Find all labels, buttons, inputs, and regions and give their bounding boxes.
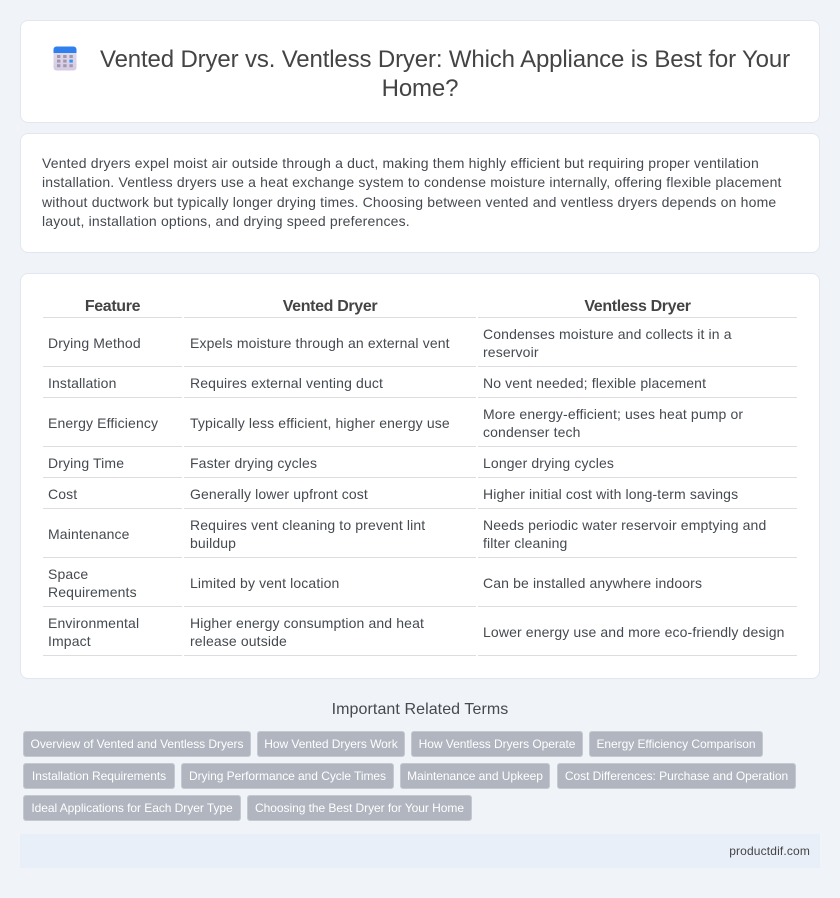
- tag: Ideal Applications for Each Dryer Type: [31, 801, 233, 815]
- intro text: without ductwork but typically longer drying times. Choosing between vented and ventless dryers depends on home: [42, 194, 776, 210]
- row: maintenance: Requires vent cleaning to prevent lint: [190, 517, 425, 533]
- panel: header: [20, 20, 820, 123]
- comparison table: [43, 298, 797, 656]
- icon: calendar: [54, 46, 76, 70]
- row: drying method: Condenses moisture and collects it in a: [483, 326, 732, 342]
- tag: How Ventless Dryers Operate: [419, 737, 575, 751]
- row: space requirements: Requirements: [48, 584, 137, 600]
- table header row: Ventless Dryer: [584, 298, 691, 315]
- row: maintenance: [43, 517, 797, 558]
- row: energy efficiency: [43, 406, 797, 447]
- tag: [589, 731, 763, 757]
- tag: [557, 763, 796, 789]
- row: drying method: Expels moisture through an external vent: [190, 335, 450, 351]
- tag: How Vented Dryers Work: [264, 737, 398, 751]
- row: environmental impact: Environmental: [48, 615, 139, 631]
- row: cost: [43, 486, 797, 509]
- row: environmental impact: Impact: [48, 633, 91, 649]
- row: drying time: Faster drying cycles: [190, 455, 317, 471]
- row: maintenance: Needs periodic water reservoir emptying and: [483, 517, 766, 533]
- tag: Choosing the Best Dryer for Your Home: [255, 801, 464, 815]
- tag: [400, 763, 550, 789]
- row: drying method: [43, 326, 797, 367]
- row: drying method: reservoir: [483, 344, 539, 360]
- row: space requirements: Space: [48, 566, 88, 582]
- row: environmental impact: release outside: [190, 633, 287, 649]
- row: maintenance: buildup: [190, 535, 236, 551]
- intro text: [42, 154, 782, 229]
- tag: Overview of Vented and Ventless Dryers: [31, 737, 243, 751]
- row: space requirements: Limited by vent location: [190, 575, 339, 591]
- row: environmental impact: Higher energy consumption and heat: [190, 615, 424, 631]
- tag: [257, 731, 405, 757]
- row: installation: No vent needed; flexible placement: [483, 375, 706, 391]
- tag: [23, 795, 241, 821]
- intro text: layout, installation options, and drying speed preferences.: [42, 213, 410, 229]
- row: cost: Higher initial cost with long-term savings: [483, 486, 738, 502]
- tag: Energy Efficiency Comparison: [596, 737, 756, 751]
- tag: [411, 731, 583, 757]
- panel: introduction: [20, 133, 820, 253]
- panel: comparison table: [20, 273, 820, 679]
- table header row: Vented Dryer: [283, 298, 377, 315]
- title: [100, 46, 790, 102]
- row: drying method: Drying Method: [48, 335, 141, 351]
- intro text: Vented dryers expel moist air outside through a duct, making them highly efficient but requiring proper ventilation: [42, 154, 759, 170]
- title: Home?: [382, 75, 458, 102]
- row: drying time: [43, 455, 797, 478]
- row: cost: Cost: [48, 486, 77, 502]
- footer site name: productdif.com: [729, 844, 810, 858]
- table header row: Feature: [85, 298, 140, 315]
- footer bar: [20, 834, 820, 868]
- row: installation: [43, 375, 797, 398]
- row: energy efficiency: Typically less efficient, higher energy use: [190, 415, 450, 431]
- tag: [247, 795, 472, 821]
- tag: [181, 763, 394, 789]
- related terms tags: [23, 731, 796, 821]
- row: space requirements: Can be installed anywhere indoors: [483, 575, 702, 591]
- tag: Maintenance and Upkeep: [407, 769, 543, 783]
- row: energy efficiency: More energy-efficient; uses heat pump or: [483, 406, 743, 422]
- row: drying time: Drying Time: [48, 455, 124, 471]
- tag: Installation Requirements: [32, 769, 166, 783]
- row: environmental impact: Lower energy use and more eco-friendly design: [483, 624, 785, 640]
- row: energy efficiency: Energy Efficiency: [48, 415, 158, 431]
- row: environmental impact: [43, 615, 797, 656]
- title: Vented Dryer vs. Ventless Dryer: Which Appliance is Best for Your: [100, 46, 790, 73]
- tag: Drying Performance and Cycle Times: [189, 769, 386, 783]
- tag: [23, 763, 175, 789]
- tag: [23, 731, 251, 757]
- row: cost: Generally lower upfront cost: [190, 486, 368, 502]
- row: installation: Installation: [48, 375, 116, 391]
- row: installation: Requires external venting duct: [190, 375, 383, 391]
- heading: important related terms: Important Related Terms: [332, 701, 508, 718]
- table header row: [43, 298, 797, 318]
- intro text: installation. Ventless dryers use a heat exchange system to condense moisture internally, offering flexible placement: [42, 174, 782, 190]
- row: maintenance: Maintenance: [48, 526, 130, 542]
- row: energy efficiency: condenser tech: [483, 424, 581, 440]
- row: space requirements: [43, 566, 797, 607]
- row: drying time: Longer drying cycles: [483, 455, 614, 471]
- row: maintenance: filter cleaning: [483, 535, 567, 551]
- tag: Cost Differences: Purchase and Operation: [565, 769, 788, 783]
